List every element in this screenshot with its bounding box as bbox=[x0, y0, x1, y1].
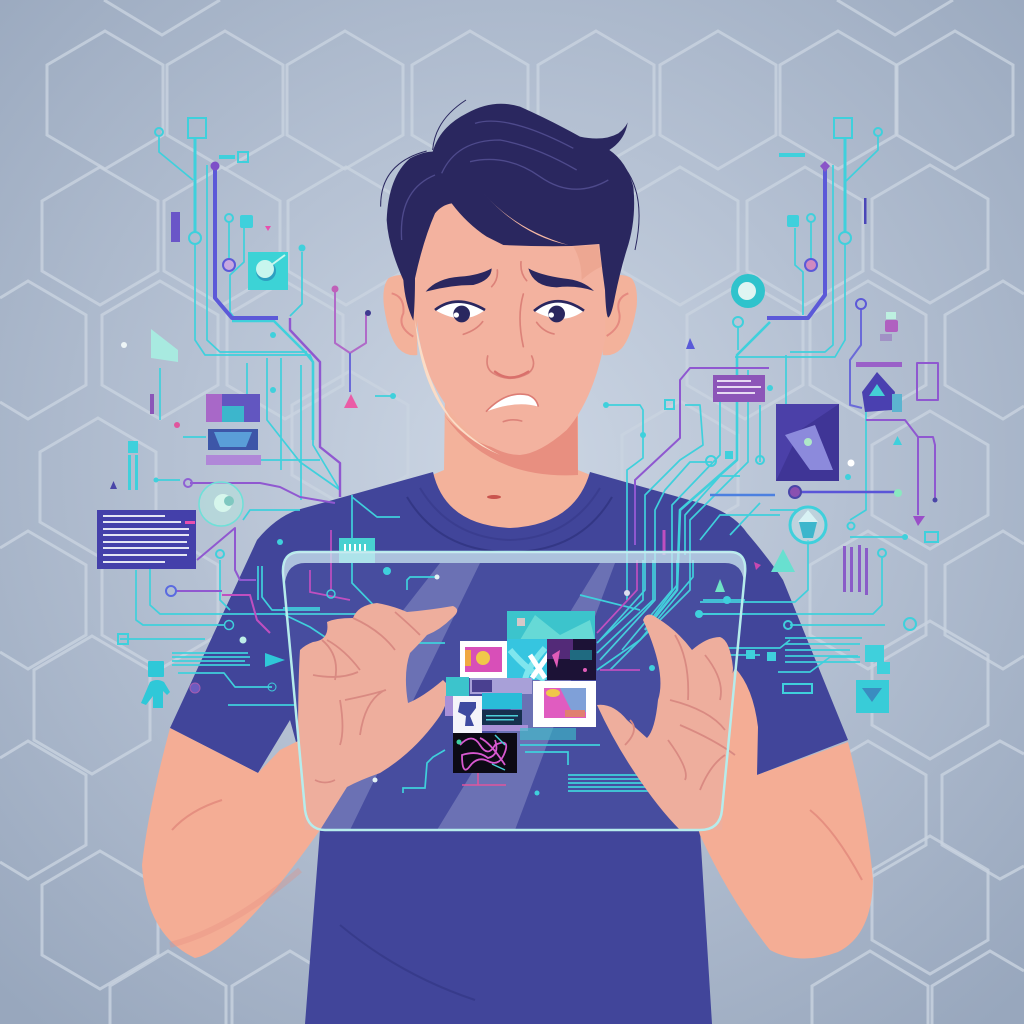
face lines and nose bbox=[463, 262, 554, 422]
icon: gem bbox=[856, 362, 902, 412]
eyes bbox=[435, 301, 584, 322]
hand lines: left bbox=[313, 612, 420, 782]
image: purple card bbox=[776, 404, 839, 481]
ears bbox=[383, 275, 637, 355]
left circuit nodes and icons bbox=[97, 118, 396, 708]
image: white pink bbox=[533, 681, 596, 727]
neck bbox=[425, 390, 598, 532]
icon: triangle marker bbox=[265, 653, 285, 667]
bars bbox=[843, 545, 868, 595]
bars bbox=[110, 441, 138, 490]
glass reflections bbox=[298, 563, 615, 830]
nodes on glass bbox=[327, 567, 731, 796]
hair highlights bbox=[381, 100, 639, 250]
shirt collar bbox=[340, 488, 612, 1000]
circuits on glass bbox=[283, 530, 745, 793]
cheek highlight bbox=[415, 320, 500, 455]
neck shadow bbox=[444, 370, 578, 475]
text block bbox=[97, 510, 196, 569]
hand: right bbox=[597, 614, 733, 830]
icon: triangle bbox=[151, 329, 178, 362]
icon: round teal badge bbox=[731, 274, 765, 308]
image: pink with circle bbox=[460, 641, 507, 678]
images: purple stack bbox=[206, 394, 261, 465]
icon: bulb bbox=[790, 507, 826, 543]
id tag bbox=[171, 212, 180, 242]
circuits: left side bbox=[120, 137, 400, 705]
hair fringe highlight bbox=[484, 194, 568, 245]
neck mark bbox=[487, 495, 501, 499]
icon: teal square bbox=[248, 252, 288, 290]
icon: teal triangle bbox=[771, 549, 795, 572]
circuits: right side bbox=[600, 137, 905, 672]
arm: right bbox=[690, 668, 873, 959]
image collage bbox=[445, 611, 596, 773]
face bbox=[415, 200, 606, 455]
text panel: purple bbox=[713, 375, 765, 402]
hand: left bbox=[298, 603, 457, 830]
shirt bbox=[170, 472, 848, 1024]
icon: mint jar bbox=[880, 312, 898, 341]
image: cyan dark bbox=[482, 693, 576, 740]
image: black squiggle bbox=[453, 733, 517, 773]
hand lines: right bbox=[625, 635, 735, 790]
image: dark purple bbox=[547, 639, 596, 680]
arm shading bbox=[170, 800, 862, 945]
arm: left bbox=[142, 728, 320, 958]
tablet content and hands bbox=[283, 530, 745, 830]
connector under collage bbox=[462, 773, 506, 785]
glass panel bbox=[283, 552, 745, 830]
glass frame bbox=[283, 552, 745, 830]
icon: teal badge bbox=[856, 680, 889, 713]
right circuit nodes and icons bbox=[603, 118, 938, 713]
image: white blot bbox=[453, 696, 482, 733]
image: cyan X bbox=[507, 639, 552, 680]
image: teal lavender bbox=[445, 677, 532, 716]
mouth bbox=[486, 394, 538, 412]
eyebrows bbox=[426, 268, 594, 292]
image: teal top bbox=[507, 611, 595, 640]
forehead shadow bbox=[573, 245, 602, 280]
head bbox=[381, 100, 639, 455]
icon: glass orb bbox=[199, 482, 243, 526]
hair bbox=[387, 104, 634, 321]
icon: person bbox=[141, 661, 170, 708]
